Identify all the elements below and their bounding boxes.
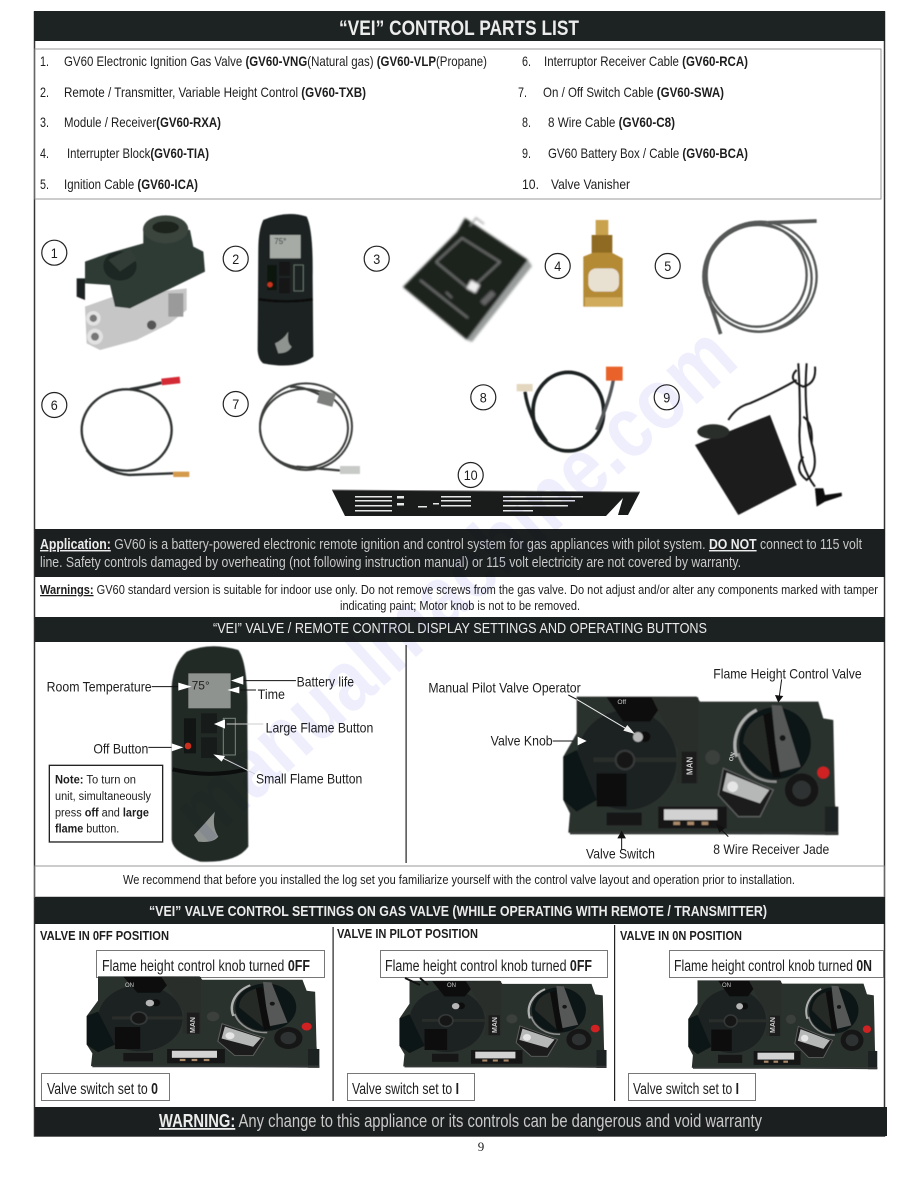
label: 8 wire receiver jade: 8 Wire Receiver Jade	[713, 841, 829, 857]
text block: parts list box: 9.	[522, 145, 531, 161]
panel: valve in off position: VALVE IN 0FF POSITION	[40, 929, 169, 943]
part number callouts: 4	[554, 258, 561, 274]
text block: parts list box: GV60 Battery Box / Cable (GV60-BCA)	[548, 145, 748, 161]
icon: valve pilot position	[399, 978, 607, 1068]
panel: valve in pilot position: VALVE IN PILOT POSITION	[337, 927, 478, 941]
text block: parts list box: Module / Receiver(GV60-RXA)	[64, 114, 221, 130]
heading: valve and remote display settings	[35, 617, 885, 642]
label: flame height control valve: Flame Height Control Valve	[713, 665, 862, 681]
page number: 9	[478, 1139, 484, 1154]
panel: valve in off position	[40, 929, 324, 1100]
text block: parts list box	[35, 49, 881, 199]
label: room temperature: Room Temperature	[47, 679, 152, 695]
callout: bottom warning band: WARNING: Any change to this appliance or its controls can be dangerous and void warranty	[159, 1111, 762, 1131]
text block: parts list box: 1.	[40, 53, 49, 69]
icon: gas valve top view	[563, 697, 838, 835]
label: valve switch I on: Valve switch set to I	[633, 1081, 739, 1098]
icon: valve off position: ON	[125, 983, 134, 989]
icon: valve on position	[688, 980, 877, 1069]
part number callouts: 7	[232, 396, 239, 412]
callout: application band	[35, 529, 885, 577]
callout: application band: line. Safety controls damaged by overheating (not following instruction manual) or 115 volt electricity are not covered by warranty.	[40, 555, 741, 571]
label: small flame button: Small Flame Button	[256, 770, 362, 786]
text block: recommendation	[35, 866, 884, 897]
text block: parts list box: Valve Vanisher	[551, 176, 630, 192]
text block: parts list box: Interruptor Receiver Cable (GV60-RCA)	[544, 53, 748, 69]
part number callouts: 8	[480, 390, 487, 406]
label: off button: Off Button	[93, 740, 148, 756]
panel: remote control display diagram	[47, 646, 373, 862]
text block: warnings	[40, 583, 878, 613]
callout: note box: unit, simultaneously	[55, 789, 151, 803]
text block: parts list box: 4.	[40, 145, 49, 161]
label: large flame button: Large Flame Button	[266, 719, 373, 735]
icon: valve on position: ON	[722, 983, 731, 989]
text block: parts list box: Ignition Cable (GV60-ICA)	[64, 176, 198, 192]
watermark: manualmachine.com	[154, 307, 754, 860]
label: valve switch I pilot: Valve switch set to I	[352, 1081, 459, 1098]
icon: part 5 ignition cable photo	[703, 221, 817, 334]
icon: remote control: 75°	[192, 678, 210, 692]
heading: parts list	[34, 11, 885, 41]
panel: parts list	[34, 11, 885, 199]
icon: gas valve top view: MAN	[686, 757, 695, 775]
label: valve switch: Valve Switch	[586, 846, 655, 862]
text block: parts list box: 5.	[40, 176, 49, 192]
part number callouts: 1	[51, 245, 58, 261]
icon: valve on position: MAN	[770, 1017, 777, 1033]
label: flame height off: Flame height control knob turned 0FF	[102, 958, 310, 975]
panel: valve in on position	[620, 929, 884, 1100]
callout: application band: Application: GV60 is a battery-powered electronic remote ignition and control system for gas appliances with pilot system. DO NOT connect to 115 volt	[40, 537, 862, 553]
label: valve switch	[586, 831, 655, 862]
label: flame height on	[670, 950, 884, 978]
heading: valve control settings	[35, 897, 885, 924]
text block: parts list box: Interrupter Block(GV60-TIA)	[67, 145, 209, 161]
text block: recommendation: We recommend that before you installed the log set you familiarize yourself with the control valve layout and operation prior to installation.	[123, 873, 795, 887]
icon: part 3 module photo	[403, 218, 532, 342]
icon: part 6 interruptor receiver cable photo	[82, 380, 189, 475]
icon: valve off position	[87, 976, 319, 1068]
part number callouts: 5	[664, 258, 671, 274]
callout: note box: flame button.	[55, 822, 119, 836]
part number callouts: 6	[51, 397, 58, 413]
text block: parts list box: GV60 Electronic Ignition Gas Valve (GV60-VNG(Natural gas) (GV60-VLP(Propane)	[64, 53, 487, 69]
label: manual pilot valve operator: Manual Pilot Valve Operator	[428, 680, 581, 696]
icon: part 2 remote photo: 75°	[274, 237, 286, 246]
icon: part 7 on/off switch cable photo	[260, 383, 360, 474]
text block: parts list box: On / Off Switch Cable (GV60-SWA)	[543, 84, 724, 100]
text block: warnings: indicating paint; Motor knob is not to be removed.	[340, 599, 580, 613]
icon: part 2 remote photo	[258, 214, 313, 366]
label: manual pilot valve operator	[428, 680, 635, 734]
panel: valve in pilot position	[337, 927, 608, 1100]
part number callouts: 10	[464, 467, 478, 483]
label: large flame button	[214, 719, 373, 735]
heading: parts list: “VEI” CONTROL PARTS LIST	[339, 17, 579, 40]
text block: parts list box: 10.	[522, 176, 539, 192]
text block: parts list box: 8 Wire Cable (GV60-C8)	[548, 114, 675, 130]
label: small flame button	[213, 754, 362, 786]
icon: part 9 battery box photo	[695, 363, 842, 515]
label: valve switch I pilot	[348, 1074, 474, 1100]
label: flame height on: Flame height control knob turned 0N	[674, 958, 872, 975]
icon: remote control	[172, 646, 248, 862]
heading: valve and remote display settings: “VEI” VALVE / REMOTE CONTROL DISPLAY SETTINGS AND OPERATING BUTTONS	[213, 621, 707, 637]
label: battery life: Battery life	[297, 674, 354, 690]
label: 8 wire receiver jade	[713, 823, 829, 857]
label: time	[227, 686, 285, 702]
icon: valve pilot position: MAN	[492, 1017, 499, 1033]
icon: part 4 interrupter block photo	[583, 220, 623, 307]
heading: valve control settings: “VEI” VALVE CONTROL SETTINGS ON GAS VALVE (WHILE OPERATING WITH REMOTE / TRANSMITTER)	[149, 903, 767, 920]
label: valve switch 0	[42, 1074, 170, 1100]
icon: part 10 valve vanisher photo	[332, 490, 640, 516]
part number callouts: 2	[232, 251, 239, 267]
text block: parts list box: 7.	[518, 84, 527, 100]
panel: valve in on position: VALVE IN 0N POSITION	[620, 929, 742, 943]
callout: note box	[49, 765, 163, 842]
panel: valve diagram	[428, 665, 862, 862]
part number callouts	[42, 240, 680, 488]
label: flame height off pilot	[380, 950, 608, 978]
icon: gas valve top view: ON	[729, 752, 737, 762]
callout: note box: Note: To turn on	[55, 772, 136, 786]
callout: bottom warning band	[35, 1107, 887, 1136]
text block: parts list box: 8.	[522, 114, 531, 130]
label: flame height off pilot: Flame height control knob turned 0FF	[385, 958, 592, 975]
label: time: Time	[258, 686, 285, 702]
callout: note box: press off and large	[55, 806, 149, 820]
text block: parts list box: 3.	[40, 114, 49, 130]
icon: valve pilot position: ON	[447, 983, 456, 989]
part number callouts: 9	[663, 390, 670, 406]
icon: valve off position: MAN	[190, 1017, 197, 1033]
label: valve switch 0: Valve switch set to 0	[47, 1081, 158, 1098]
icon: part 1 gas valve photo	[77, 215, 205, 350]
label: off button	[93, 740, 183, 756]
label: battery life	[231, 674, 354, 690]
label: valve switch I on	[628, 1074, 756, 1100]
text block: parts list box: 6.	[522, 53, 531, 69]
icon: gas valve top view: Off	[617, 699, 626, 706]
label: flame height off	[96, 950, 324, 978]
part number callouts: 3	[373, 251, 380, 267]
icon: part 8 wire cable photo	[517, 367, 623, 451]
text block: parts list box: 2.	[40, 84, 49, 100]
label: flame height control valve	[713, 665, 862, 703]
text block: parts list box: Remote / Transmitter, Variable Height Control (GV60-TXB)	[64, 84, 366, 100]
label: valve knob: Valve Knob	[491, 732, 553, 748]
